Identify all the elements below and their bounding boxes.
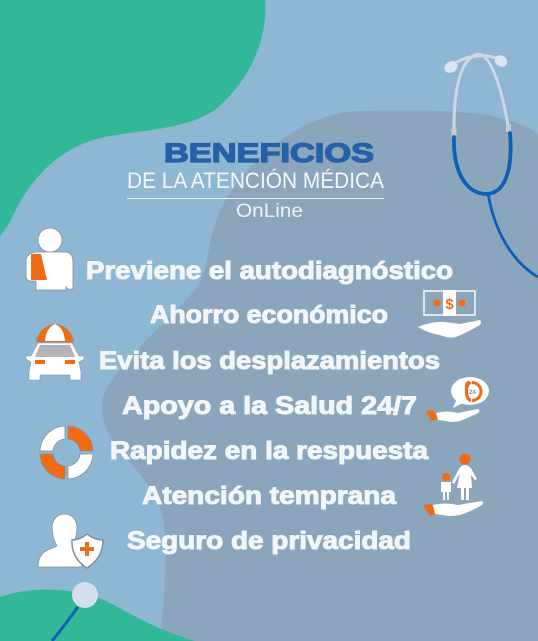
top-left teal shape: [0, 0, 265, 236]
title: BENEFICIOS: BENEFICIOS: [164, 138, 374, 168]
icon: 24h phone speech bubble over hand: 24: [469, 390, 476, 396]
icon: adult and child over hand: [423, 454, 483, 516]
benefit: Atención temprana: Atención temprana: [142, 482, 397, 510]
benefit: Apoyo a la Salud 24/7: Apoyo a la Salud 24/7: [122, 392, 417, 420]
icon: person with shield: [38, 514, 103, 568]
subtitle: OnLine: OnLine: [236, 201, 303, 222]
title block: [127, 138, 384, 222]
benefit: Seguro de privacidad: Seguro de privacidad: [127, 527, 411, 555]
benefit: Previene el autodiagnóstico: Previene el autodiagnóstico: [86, 257, 453, 285]
background blob: darker shape: [102, 111, 538, 641]
icon: money over hand: $: [445, 296, 454, 313]
benefit: Ahorro económico: Ahorro económico: [150, 301, 388, 329]
stethoscope: [442, 53, 538, 277]
benefit: Evita los desplazamientos: Evita los desplazamientos: [99, 347, 440, 375]
icon: money over hand: [418, 290, 481, 338]
subtitle: DE LA ATENCIÓN MÉDICA: [127, 168, 384, 193]
icon: 24h phone speech bubble over hand: [426, 377, 489, 422]
icon: lifebuoy: [40, 426, 93, 479]
benefit: Rapidez en la respuesta: Rapidez en la respuesta: [110, 437, 429, 465]
icon: person with arm sling: [26, 228, 73, 290]
stethoscope chest piece: [52, 582, 98, 641]
bottom-left teal shape: [0, 590, 195, 641]
icon: car with umbrella: [26, 324, 84, 380]
